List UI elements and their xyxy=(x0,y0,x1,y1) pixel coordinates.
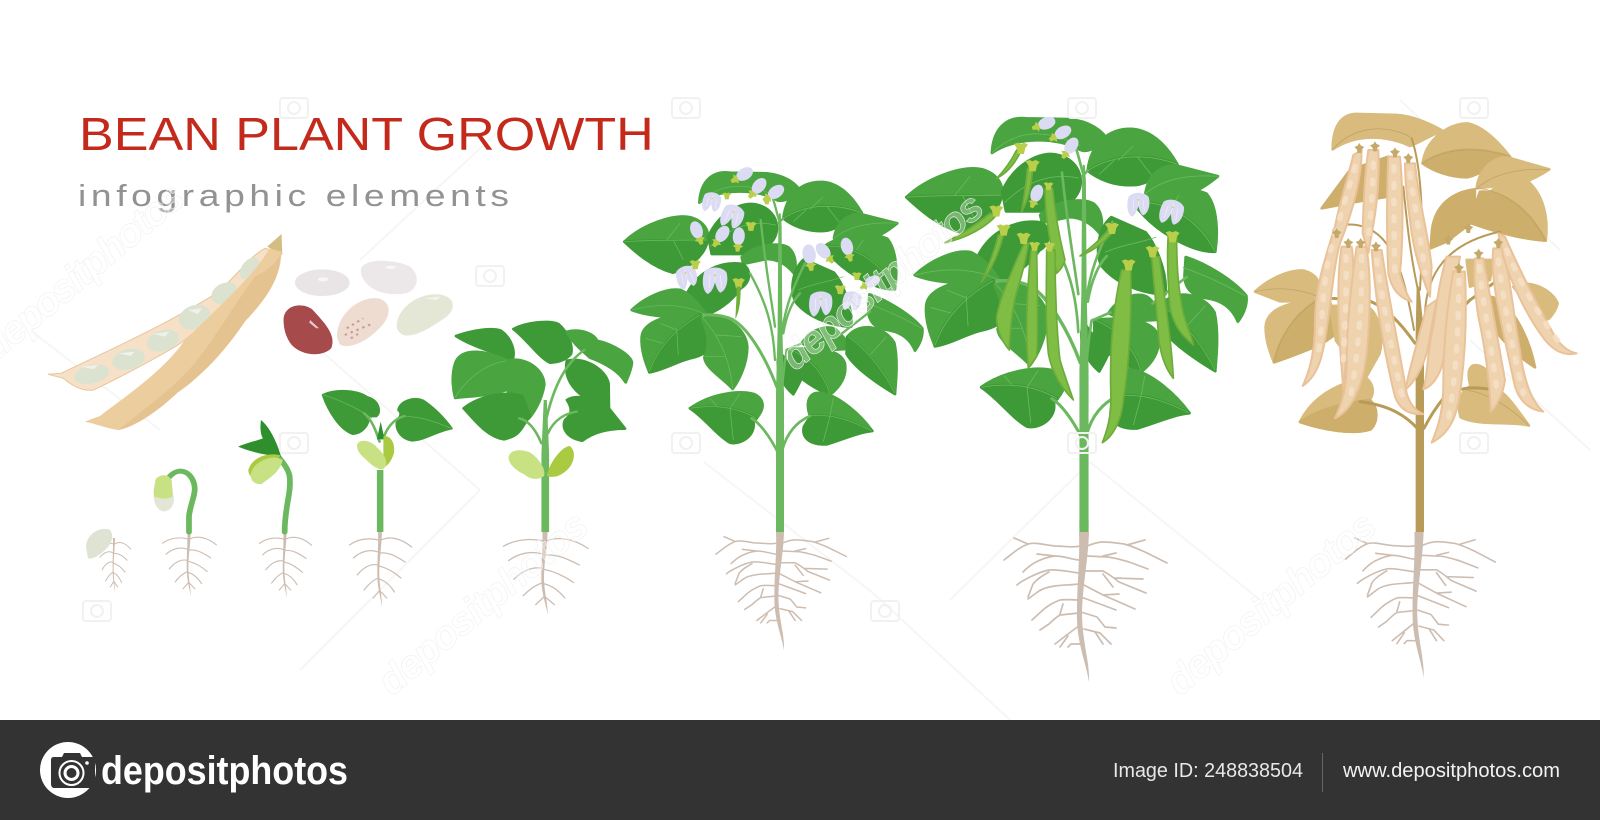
leaves xyxy=(323,391,379,434)
cotyledons xyxy=(383,436,394,467)
white bean xyxy=(295,269,350,296)
logo text: depositphotos xyxy=(101,749,348,793)
cotyledons xyxy=(248,454,281,478)
website url: www.depositphotos.com xyxy=(1342,760,1560,782)
red kidney bean xyxy=(284,305,333,354)
leaves xyxy=(456,329,513,360)
roots xyxy=(259,532,312,598)
stage 4: seedling xyxy=(323,391,451,607)
green pods and flowers xyxy=(945,114,1193,443)
roots xyxy=(163,532,216,596)
cotyledons xyxy=(547,446,574,477)
first leaves xyxy=(238,420,281,457)
dry stem xyxy=(1330,138,1500,532)
foliage xyxy=(624,172,922,532)
watermark text xyxy=(0,174,1385,704)
stems xyxy=(541,400,549,532)
speckled bean xyxy=(337,298,389,346)
cotyledon green xyxy=(154,475,173,499)
stage 3: opening sprout xyxy=(238,420,312,598)
watermark text: depositphotos xyxy=(370,503,597,704)
footer bar xyxy=(0,720,1600,820)
roots xyxy=(503,532,588,614)
bean pods xyxy=(48,234,282,430)
stem xyxy=(278,457,290,532)
stem xyxy=(377,470,383,532)
stage 8: mature dry plant xyxy=(1255,114,1577,678)
subtitle: infographic elements xyxy=(78,179,514,213)
stage 6: flowering plant xyxy=(624,164,922,651)
pale green bean xyxy=(397,294,453,336)
image id: Image ID: 248838504 xyxy=(1113,760,1303,782)
watermark text: depositphotos xyxy=(1158,503,1385,704)
roots xyxy=(1004,532,1167,682)
stage 7: plant with green pods xyxy=(907,114,1246,682)
petioles xyxy=(364,413,404,442)
closed pod xyxy=(85,234,282,430)
roots xyxy=(98,538,131,594)
open pod xyxy=(48,248,271,390)
roots xyxy=(716,532,846,650)
dry pods xyxy=(1303,141,1577,443)
stage 2: hook sprout xyxy=(154,471,216,596)
seed xyxy=(86,529,112,559)
watermark camera icons xyxy=(83,98,1488,621)
foliage xyxy=(907,118,1246,528)
logo icon xyxy=(40,742,96,798)
title: BEAN PLANT GROWTH xyxy=(79,109,654,160)
roots xyxy=(350,532,412,607)
cotyledon xyxy=(154,475,174,511)
stage 5: young plant xyxy=(453,322,632,614)
stage 1: germinating seed xyxy=(86,529,131,594)
beans xyxy=(284,261,453,354)
roots xyxy=(1345,532,1495,678)
watermark text: depositphotos xyxy=(773,184,992,379)
shoot tip xyxy=(377,422,385,439)
white bean 2 xyxy=(361,261,417,294)
flowers xyxy=(674,164,882,319)
dry leaves xyxy=(1255,114,1558,432)
stem xyxy=(168,471,195,532)
